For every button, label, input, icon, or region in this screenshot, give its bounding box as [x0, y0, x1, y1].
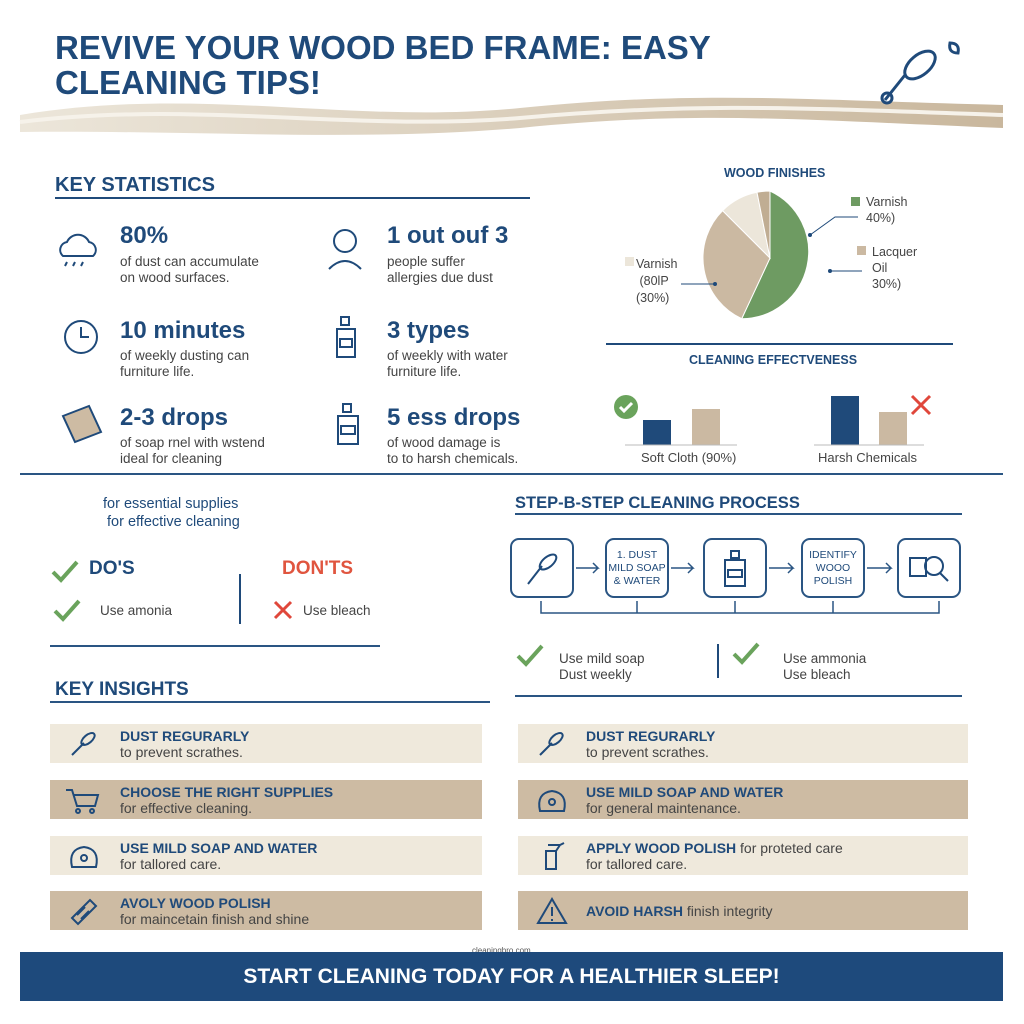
stat 1 out of 3 — [328, 222, 508, 285]
process flow: & WATER — [614, 574, 660, 586]
panel: key insights left: CHOOSE THE RIGHT SUPPLIES — [120, 784, 333, 800]
process flow: 1. DUST — [617, 548, 657, 560]
footer banner — [20, 952, 1003, 1001]
panel: key insights right: APPLY WOOD POLISH for proteted care — [586, 840, 843, 856]
header wave — [20, 98, 1003, 135]
process do/don't summary: Use bleach — [783, 667, 851, 682]
panel: key insights left — [50, 724, 482, 930]
stat 5 drops: of wood damage is — [387, 435, 500, 450]
panel: key insights left: DUST REGURARLY — [120, 728, 249, 744]
footer banner: START CLEANING TODAY FOR A HEALTHIER SLEEP! — [243, 964, 780, 988]
bar chart: cleaning effectiveness: Harsh Chemicals — [818, 450, 917, 465]
stat 2-3 drops: ideal for cleaning — [120, 451, 222, 466]
stat 2-3 drops — [62, 404, 265, 466]
heading: key insights: KEY INSIGHTS — [55, 679, 189, 700]
stat 3 types: of weekly with water — [387, 348, 508, 363]
panel: key insights right: for general maintenance. — [586, 800, 741, 816]
bar chart: cleaning effectiveness: CLEANING EFFECTVENESS — [689, 353, 857, 367]
stat 80%: on wood surfaces. — [120, 270, 230, 285]
panel: key insights left: to prevent scrathes. — [120, 744, 243, 760]
panel: do's and don'ts — [50, 558, 380, 647]
process do/don't summary: Use ammonia — [783, 651, 866, 666]
stat 10 minutes: furniture life. — [120, 364, 194, 379]
pie chart: wood finishes: Lacquer — [872, 245, 917, 259]
heading: key statistics: KEY STATISTICS — [55, 174, 215, 196]
panel: key insights right: AVOID HARSH finish integrity — [586, 902, 772, 918]
stat 1 out of 3: 1 out ouf 3 — [387, 222, 508, 249]
panel: key insights right — [518, 724, 968, 930]
panel: key insights left: for maincetain finish and shine — [120, 910, 309, 926]
title — [55, 29, 711, 101]
panel: statistics — [59, 222, 520, 466]
title: REVIVE YOUR WOOD BED FRAME: EASY — [55, 29, 711, 66]
stat 10 minutes: of weekly dusting can — [120, 348, 249, 363]
bar chart: cleaning effectiveness: Soft Cloth (90%) — [641, 450, 736, 465]
stat 2-3 drops: of soap rnel with wstend — [120, 435, 265, 450]
stat 80%: of dust can accumulate — [120, 254, 259, 269]
panel: do's and don'ts: Use bleach — [303, 603, 371, 618]
panel: key insights left: for effective cleaning. — [120, 800, 252, 816]
text: essential supplies: for essential supplies — [103, 496, 238, 512]
pie chart: wood finishes: 30%) — [872, 277, 901, 291]
pie chart: wood finishes: Varnish — [866, 195, 907, 209]
stat 1 out of 3: people suffer — [387, 254, 465, 269]
stat 3 types: 3 types — [387, 317, 470, 344]
pie chart: wood finishes: WOOD FINISHES — [724, 166, 825, 180]
panel: do's and don'ts: Use amonia — [100, 603, 172, 618]
pie chart: wood finishes: Oil — [872, 261, 887, 275]
panel: do's and don'ts: DON'TS — [282, 558, 353, 579]
pie chart: wood finishes: 40%) — [866, 211, 895, 225]
stat 3 types: furniture life. — [387, 364, 461, 379]
icon: brush — [880, 42, 960, 104]
text: essential supplies — [103, 496, 240, 530]
stat 5 drops — [337, 403, 520, 466]
panel: key insights right: USE MILD SOAP AND WATER — [586, 784, 783, 800]
stat 80%: 80% — [120, 222, 168, 249]
pie chart: wood finishes: Varnish — [636, 257, 677, 271]
stat 10 minutes — [64, 317, 249, 379]
title: CLEANING TIPS! — [55, 64, 321, 101]
stat 3 types — [336, 316, 508, 379]
process flow: POLISH — [814, 574, 852, 586]
pie chart: wood finishes: (80lP — [639, 274, 669, 288]
bar chart: cleaning effectiveness — [614, 353, 931, 465]
stat 10 minutes: 10 minutes — [120, 317, 245, 344]
process flow: WOOO — [816, 562, 850, 574]
panel: key insights right: to prevent scrathes. — [586, 744, 709, 760]
stat 5 drops: to to harsh chemicals. — [387, 451, 518, 466]
stat 1 out of 3: allergies due dust — [387, 270, 493, 285]
text: essential supplies: for effective cleaning — [107, 514, 240, 530]
stat 80% — [59, 222, 259, 285]
process flow: IDENTIFY — [809, 548, 857, 560]
panel: do's and don'ts: DO'S — [89, 558, 135, 579]
pie chart: wood finishes: (30%) — [636, 291, 669, 305]
stat 5 drops: 5 ess drops — [387, 404, 520, 431]
process flow: MILD SOAP — [608, 562, 666, 574]
panel: key insights right: DUST REGURARLY — [586, 728, 715, 744]
watermark: cleaningbro.com — [472, 946, 531, 955]
panel: key insights right: for tallored care. — [586, 856, 687, 872]
heading: step-by-step: STEP-B-STEP CLEANING PROCESS — [515, 494, 800, 512]
panel: key insights left: for tallored care. — [120, 856, 221, 872]
panel: key insights left: USE MILD SOAP AND WATER — [120, 840, 317, 856]
process flow — [510, 538, 961, 614]
stat 2-3 drops: 2-3 drops — [120, 404, 228, 431]
panel: key insights left: AVOLY WOOD POLISH — [120, 894, 271, 910]
process do/don't summary — [515, 642, 962, 697]
process do/don't summary: Dust weekly — [559, 667, 632, 682]
pie chart: wood finishes — [625, 166, 917, 318]
process do/don't summary: Use mild soap — [559, 651, 645, 666]
